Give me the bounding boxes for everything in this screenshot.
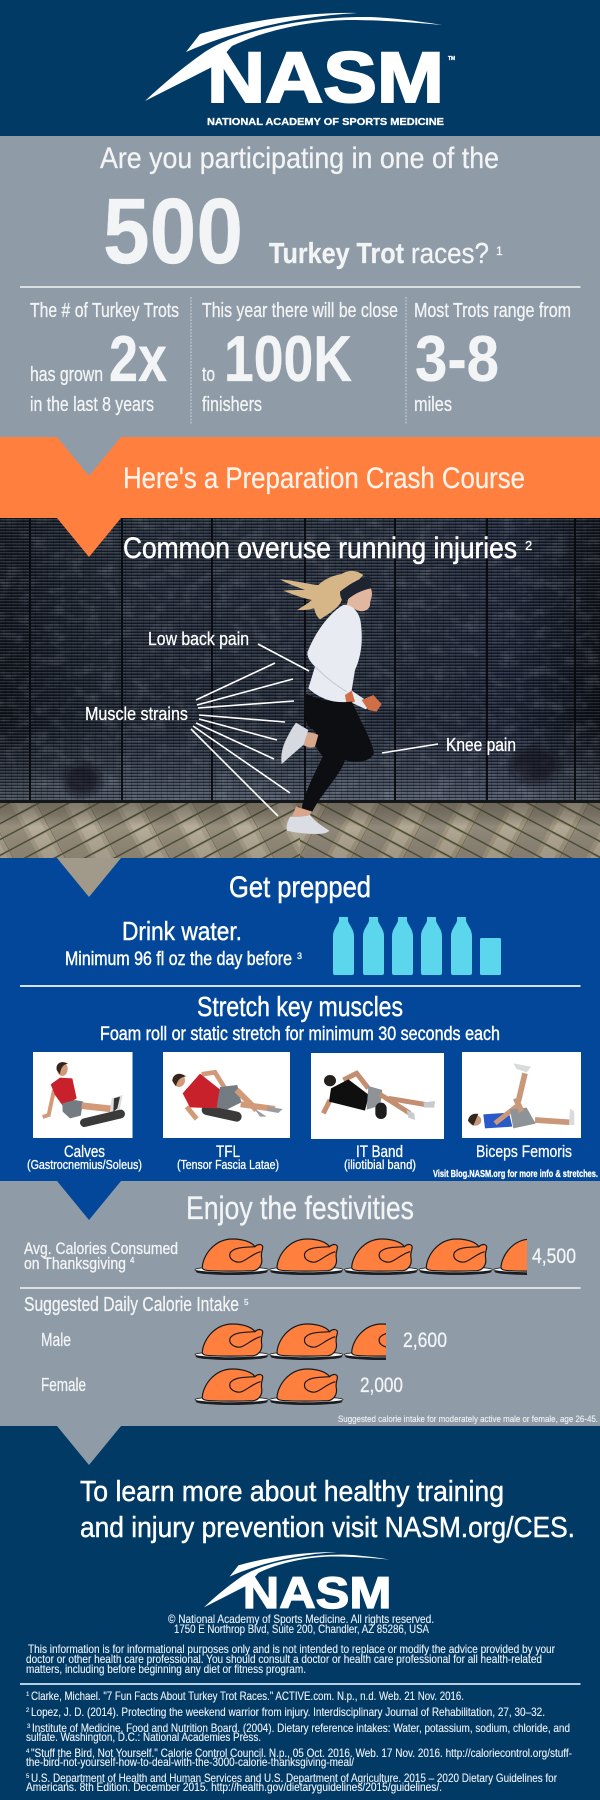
drink water text: 3: [297, 951, 302, 961]
panel: header: [0, 0, 600, 136]
label: muscle strains: Muscle strains: [85, 703, 188, 724]
turkey trot races text: Turkey Trot: [269, 238, 404, 270]
stat: 2x growth: has grown: [30, 364, 103, 386]
arrow: gray into orange: [57, 437, 121, 476]
references: the-bird-not-yourself-how-to-deal-with-the-3000-calorie-thanksgiving-meal/: [26, 1755, 355, 1769]
references: 5: [26, 1774, 30, 1780]
turkey trot races text: 1: [496, 244, 503, 258]
label: knee pain: Knee pain: [446, 734, 516, 755]
call to action: [80, 1476, 575, 1544]
call to action: To learn more about healthy training: [80, 1476, 504, 1508]
label: calves: (Gastrocnemius/Soleus): [27, 1157, 142, 1172]
heading: stretch key muscles: Stretch key muscles: [197, 991, 403, 1022]
photo heading: Common overuse running injuries: [123, 532, 517, 565]
references: 4: [26, 1749, 30, 1755]
arrow: gray into navy: [57, 1426, 121, 1465]
arrow: blue into gray: [57, 1181, 121, 1220]
logo: NASM: TM: [448, 56, 455, 62]
arrow: photo into blue: [57, 858, 121, 897]
label: TFL: TFL: [216, 1142, 240, 1161]
turkey trot races text: [269, 238, 503, 270]
panel: photo of runner: [0, 518, 600, 858]
panel: orange banner: [0, 437, 600, 518]
panel: footer: [0, 1426, 600, 1800]
logo: footer NASM: NASM: [243, 1569, 391, 1618]
chart: female turkeys: [195, 1369, 343, 1405]
copyright: 1750 E Northrop Blvd, Suite 200, Chandler, AZ 85286, USA: [174, 1622, 429, 1636]
label: average calories: 4: [130, 1256, 135, 1265]
photo: TFL stretch: [163, 1052, 290, 1138]
disclaimer: [26, 1642, 555, 1676]
references: Clarke, Michael. "7 Fun Facts About Turkey Trot Races." ACTIVE.com. N.p., n.d. Web. 21 Nov. 2016.: [31, 1689, 464, 1703]
panel: race statistics: [0, 136, 600, 437]
drink water text: [65, 916, 302, 970]
runner figure: [280, 571, 382, 834]
value: 2,000: 2,000: [360, 1374, 403, 1397]
disclaimer: matters, including before beginning any diet or fitness program.: [26, 1662, 306, 1676]
label: female: Female: [41, 1375, 86, 1395]
value: 2,600: 2,600: [403, 1329, 447, 1352]
stat: 3-8 miles: miles: [414, 394, 452, 416]
value: 4,500: 4,500: [532, 1245, 576, 1268]
stat: 100K finishers: finishers: [202, 394, 262, 416]
photo: IT band stretch: [311, 1053, 444, 1139]
stat: 3-8 miles: 3-8: [415, 322, 499, 395]
heading: suggested intake: 5: [244, 1298, 249, 1307]
arrow: orange into photo: [57, 518, 121, 557]
references: Americans. 8th Edition. December 2015. http://health.gov/dietaryguidelines/2015/guidelines/.: [26, 1780, 442, 1794]
chart: thanksgiving turkeys: [195, 1239, 567, 1275]
drink water text: Drink water.: [122, 916, 242, 946]
label: IT band: IT Band: [356, 1142, 403, 1161]
panel: get prepped: [0, 858, 600, 1181]
label: TFL: (Tensor Fascia Latae): [177, 1157, 279, 1172]
heading: suggested intake: Suggested Daily Calorie Intake: [24, 1294, 239, 1316]
photo: biceps femoris stretch: [462, 1052, 581, 1138]
label: calves: [27, 1142, 142, 1172]
label: low back pain: Low back pain: [148, 628, 249, 649]
turkey trot races text: races?: [411, 238, 489, 270]
stat: 100K finishers: [202, 300, 398, 416]
label: biceps femoris: Biceps Femoris: [476, 1142, 572, 1161]
label: calves: Calves: [64, 1142, 105, 1161]
stat: 100K finishers: to: [202, 364, 215, 386]
panel: enjoy the festivities: [0, 1181, 600, 1426]
banner heading: Here's a Preparation Crash Course: [123, 462, 525, 495]
icon: water bottles: [333, 917, 501, 975]
label: average calories: [24, 1239, 178, 1273]
stat: 2x growth: [30, 300, 179, 416]
label: average calories: Avg. Calories Consumed: [24, 1239, 178, 1258]
stat: 3-8 miles: [414, 300, 571, 416]
logo: footer NASM: [204, 1552, 391, 1618]
stat: 100K finishers: This year there will be close: [202, 300, 398, 322]
label: IT band: (iliotibial band): [344, 1157, 416, 1172]
references: 3: [27, 1724, 31, 1730]
heading: enjoy the festivities: Enjoy the festivities: [186, 1190, 414, 1226]
label: IT band: [344, 1142, 416, 1172]
references: sulfate. Washington, D.C.: National Academies Press.: [26, 1730, 261, 1744]
injury callout lines: [191, 644, 438, 816]
references: [26, 1689, 572, 1794]
photo: calves stretch: [33, 1052, 132, 1138]
subheading: foam roll: Foam roll or static stretch for minimum 30 seconds each: [100, 1024, 500, 1045]
copyright: [168, 1612, 434, 1636]
copyright: © National Academy of Sports Medicine. All rights reserved.: [168, 1612, 434, 1626]
logo: NASM: NASM: [207, 39, 444, 118]
photo heading: 2: [525, 538, 532, 553]
references: 1: [26, 1692, 30, 1698]
references: 2: [26, 1708, 30, 1714]
label: TFL: [177, 1142, 279, 1172]
chart: male turkeys: [194, 1323, 386, 1360]
heading: get prepped: Get prepped: [229, 871, 371, 904]
stat: 2x growth: 2x: [109, 322, 167, 395]
logo: NASM: [145, 13, 455, 118]
label: male: Male: [41, 1330, 71, 1350]
stat: 2x growth: The # of Turkey Trots: [30, 300, 179, 322]
drink water text: Minimum 96 fl oz the day before: [65, 949, 292, 970]
stat: 100K finishers: 100K: [224, 322, 352, 395]
tagline: NATIONAL ACADEMY OF SPORTS MEDICINE: [207, 116, 444, 128]
stat: 2x growth: in the last 8 years: [30, 394, 154, 416]
heading question: Are you participating in one of the: [100, 142, 499, 175]
big number 500: 500: [103, 179, 243, 283]
label: average calories: on Thanksgiving: [24, 1254, 126, 1273]
